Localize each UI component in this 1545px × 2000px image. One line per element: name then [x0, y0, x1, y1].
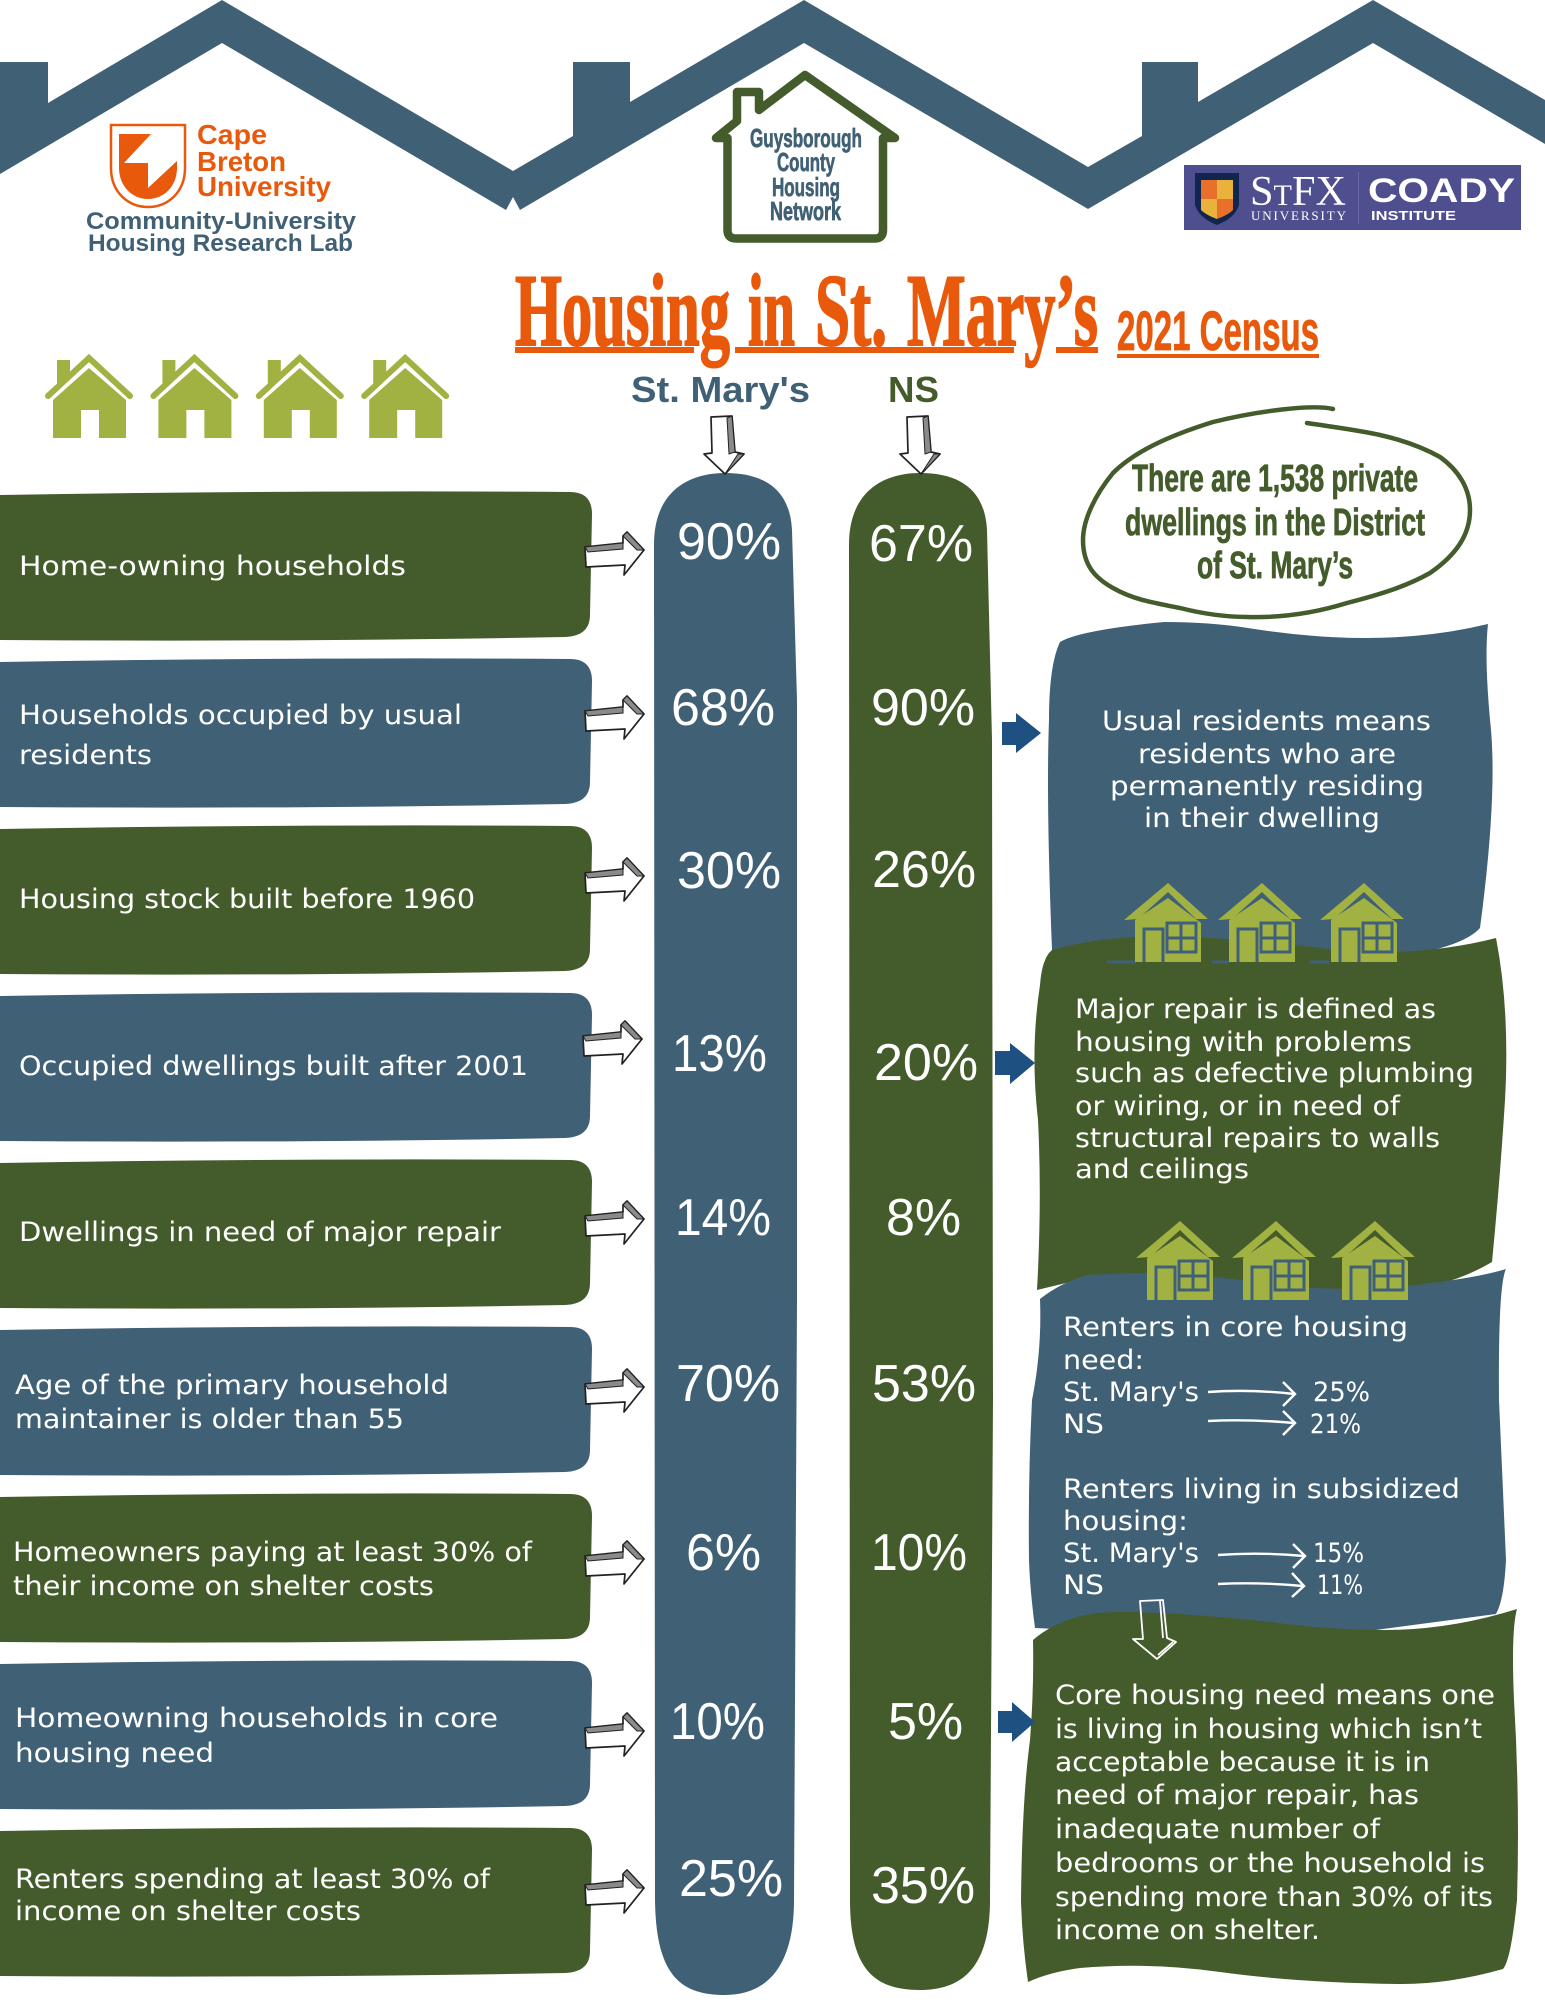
column: NS percentages	[849, 473, 993, 1990]
panel: major repair definition: or wiring, or in need of	[1075, 1091, 1402, 1122]
callout text: There are 1,538 private	[1132, 458, 1418, 500]
callout text	[1125, 458, 1425, 587]
column: NS percentages: 10%	[871, 1524, 967, 1582]
column: St. Mary's percentages: 13%	[672, 1025, 767, 1083]
panel: major repair definition	[1034, 936, 1506, 1300]
row: maintainer older than 55: Age of the primary household	[15, 1370, 449, 1401]
network name	[750, 123, 862, 226]
row: usual residents	[0, 658, 592, 808]
panel: core housing need definition: inadequate number of	[1055, 1814, 1382, 1845]
column: NS percentages: 8%	[886, 1189, 961, 1247]
callout text: of St. Mary’s	[1197, 545, 1353, 587]
panel: core housing need definition: Core housing need means one	[1055, 1680, 1495, 1711]
panel: renters core housing and subsidized: Renters living in subsidized	[1063, 1474, 1460, 1505]
arrow: row 6	[585, 1369, 644, 1412]
panel: renters core housing and subsidized: St. Mary's	[1063, 1538, 1199, 1569]
icon: row of four houses	[48, 358, 446, 438]
column: NS percentages: 90%	[871, 679, 975, 737]
panel: usual residents definition: Usual residents means	[1102, 706, 1431, 737]
network name: County	[777, 147, 835, 177]
network name: Network	[770, 196, 841, 226]
arrow: St. Mary's column	[704, 416, 744, 474]
StFX wordmark: UNIVERSITY	[1251, 208, 1347, 223]
row: home-owning households	[0, 491, 592, 641]
panel: core housing need definition: need of major repair, has	[1055, 1780, 1419, 1811]
panel: renters core housing and subsidized: housing:	[1063, 1506, 1188, 1537]
icon: three houses lower	[1136, 1221, 1415, 1300]
column: St. Mary's percentages: 10%	[670, 1693, 765, 1751]
arrow: down to core housing definition	[1133, 1600, 1176, 1659]
arrow: NS subsidized	[1218, 1573, 1304, 1597]
panel: renters core housing and subsidized: 25%	[1313, 1377, 1370, 1408]
panel: renters core housing and subsidized: 11%	[1317, 1570, 1363, 1601]
title: St.	[815, 254, 887, 368]
column: NS percentages: 53%	[872, 1355, 976, 1413]
arrow: row 9	[585, 1870, 644, 1913]
Coady wordmark: COADY	[1368, 172, 1515, 210]
panel: usual residents definition: in their dwelling	[1144, 803, 1380, 834]
title: in	[748, 254, 795, 368]
panel: major repair definition: structural repairs to walls	[1075, 1123, 1440, 1154]
roofline banner	[0, 0, 1545, 210]
row: built after 2001: Occupied dwellings built after 2001	[19, 1051, 528, 1082]
panel: renters core housing and subsidized	[1029, 1269, 1506, 1640]
row: homeowners in core need: Homeowning households in core	[15, 1703, 498, 1734]
row: homeowners paying 30%	[0, 1493, 592, 1643]
logo caption	[86, 208, 357, 257]
column: St. Mary's percentages: 68%	[671, 679, 775, 737]
row: built after 2001	[0, 992, 592, 1142]
column heading: NS: NS	[888, 369, 939, 410]
arrow: to usual residents panel	[1002, 713, 1041, 753]
panel: renters core housing and subsidized: need:	[1063, 1345, 1144, 1376]
column: St. Mary's percentages: 90%	[677, 513, 781, 571]
column: NS percentages: 26%	[872, 841, 976, 899]
column: St. Mary's percentages: 25%	[679, 1850, 783, 1908]
icon: house outline	[716, 75, 895, 238]
row: usual residents: residents	[19, 740, 152, 771]
arrow: row 2	[585, 696, 644, 739]
panel: renters core housing and subsidized: NS	[1063, 1570, 1104, 1601]
arrow: to core housing panel	[998, 1702, 1035, 1742]
row: major repair	[0, 1159, 592, 1309]
panel: usual residents definition: permanently residing	[1110, 771, 1424, 802]
arrow: row 5	[585, 1201, 644, 1244]
arrow: St. Mary's core need	[1208, 1382, 1295, 1406]
logo caption: Housing Research Lab	[88, 230, 353, 257]
callout outline	[1083, 407, 1470, 617]
network name: Guysborough	[750, 123, 862, 153]
row: homeowners paying 30%: their income on shelter costs	[13, 1571, 434, 1602]
column: NS percentages: 5%	[888, 1693, 963, 1751]
row: homeowners paying 30%: Homeowners paying at least 30% of	[13, 1537, 534, 1568]
panel: core housing need definition: income on shelter.	[1055, 1915, 1320, 1946]
row: home-owning households: Home-owning households	[19, 551, 406, 582]
panel: core housing need definition: is living in housing which isn’t	[1055, 1714, 1482, 1745]
title: Mary’s	[907, 254, 1098, 368]
logo: Guysborough County Housing Network	[716, 75, 895, 238]
arrow: NS core need	[1208, 1411, 1295, 1435]
Coady wordmark: INSTITUTE	[1371, 208, 1456, 223]
icon: StFX crest	[1195, 173, 1239, 225]
arrow: row 4	[583, 1021, 642, 1064]
panel: renters core housing and subsidized: St. Mary's	[1063, 1377, 1199, 1408]
icon: three houses upper	[1107, 883, 1404, 962]
panel: major repair definition: such as defective plumbing	[1075, 1058, 1474, 1089]
panel: core housing need definition	[1021, 1609, 1518, 1984]
column: St. Mary's percentages	[654, 473, 797, 1995]
panel: core housing need definition: bedrooms or the household is	[1055, 1848, 1485, 1879]
panel: renters core housing and subsidized: 21%	[1310, 1409, 1361, 1440]
arrow: NS column	[900, 416, 940, 474]
arrow: to major repair panel	[995, 1043, 1035, 1084]
logo wordmark: Breton	[197, 146, 286, 177]
row: maintainer older than 55: maintainer is older than 55	[15, 1404, 404, 1435]
column: NS percentages: 67%	[869, 515, 973, 573]
subtitle: 2021 Census: 2021 Census	[1117, 299, 1319, 362]
row: major repair: Dwellings in need of major repair	[19, 1217, 502, 1248]
arrow: row 1	[585, 532, 644, 575]
panel: renters core housing and subsidized: Renters in core housing	[1063, 1312, 1408, 1343]
icon: CBU shield	[111, 125, 185, 207]
column: NS percentages: 35%	[871, 1857, 975, 1915]
row: renters spending 30%: Renters spending at least 30% of	[15, 1864, 492, 1895]
callout: private dwellings	[1083, 407, 1470, 617]
panel: core housing need definition: spending more than 30% of its	[1055, 1882, 1493, 1913]
row: homeowners in core need	[0, 1660, 592, 1810]
logo wordmark	[197, 119, 331, 202]
logo: Cape Breton University	[86, 119, 357, 257]
panel: major repair definition: housing with problems	[1075, 1027, 1412, 1058]
panel: renters core housing and subsidized: 15%	[1313, 1538, 1364, 1569]
row: stock before 1960	[0, 825, 592, 975]
logo: StFX Coady Institute	[1184, 165, 1521, 230]
arrow: row 3	[585, 858, 644, 901]
arrow: row 8	[585, 1713, 644, 1756]
panel: major repair definition: and ceilings	[1075, 1154, 1249, 1185]
column: NS percentages: 20%	[874, 1034, 978, 1092]
subtitle: 2021 Census	[1117, 299, 1319, 362]
column: St. Mary's percentages: 6%	[686, 1524, 761, 1582]
logo caption: Community-University	[86, 208, 357, 235]
title	[515, 254, 1098, 368]
column: St. Mary's percentages: 70%	[676, 1355, 780, 1413]
Coady wordmark	[1368, 172, 1515, 223]
logo wordmark: Cape	[197, 119, 267, 150]
title: Housing	[515, 254, 730, 368]
arrow: row 7	[585, 1541, 644, 1584]
panel: usual residents definition: residents who are	[1138, 739, 1396, 770]
callout text: dwellings in the District	[1125, 502, 1425, 544]
row: stock before 1960: Housing stock built before 1960	[19, 884, 475, 915]
column: St. Mary's percentages: 14%	[675, 1189, 771, 1247]
column heading: St. Mary's: St. Mary's	[631, 369, 810, 410]
panel: major repair definition: Major repair is defined as	[1075, 994, 1436, 1025]
network name: Housing	[772, 172, 840, 202]
arrow: St. Mary's subsidized	[1218, 1544, 1305, 1568]
row: renters spending 30%: income on shelter costs	[15, 1896, 361, 1927]
row: maintainer older than 55	[0, 1326, 592, 1476]
row: homeowners in core need: housing need	[15, 1738, 214, 1769]
row: renters spending 30%	[0, 1827, 592, 1977]
StFX wordmark: STFX	[1250, 169, 1346, 215]
panel: usual residents definition	[1048, 622, 1493, 960]
column: St. Mary's percentages: 30%	[677, 842, 781, 900]
row: usual residents: Households occupied by usual	[19, 700, 462, 731]
panel: renters core housing and subsidized: NS	[1063, 1409, 1104, 1440]
panel: core housing need definition: acceptable because it is in	[1055, 1747, 1430, 1778]
logo wordmark: University	[197, 171, 331, 202]
